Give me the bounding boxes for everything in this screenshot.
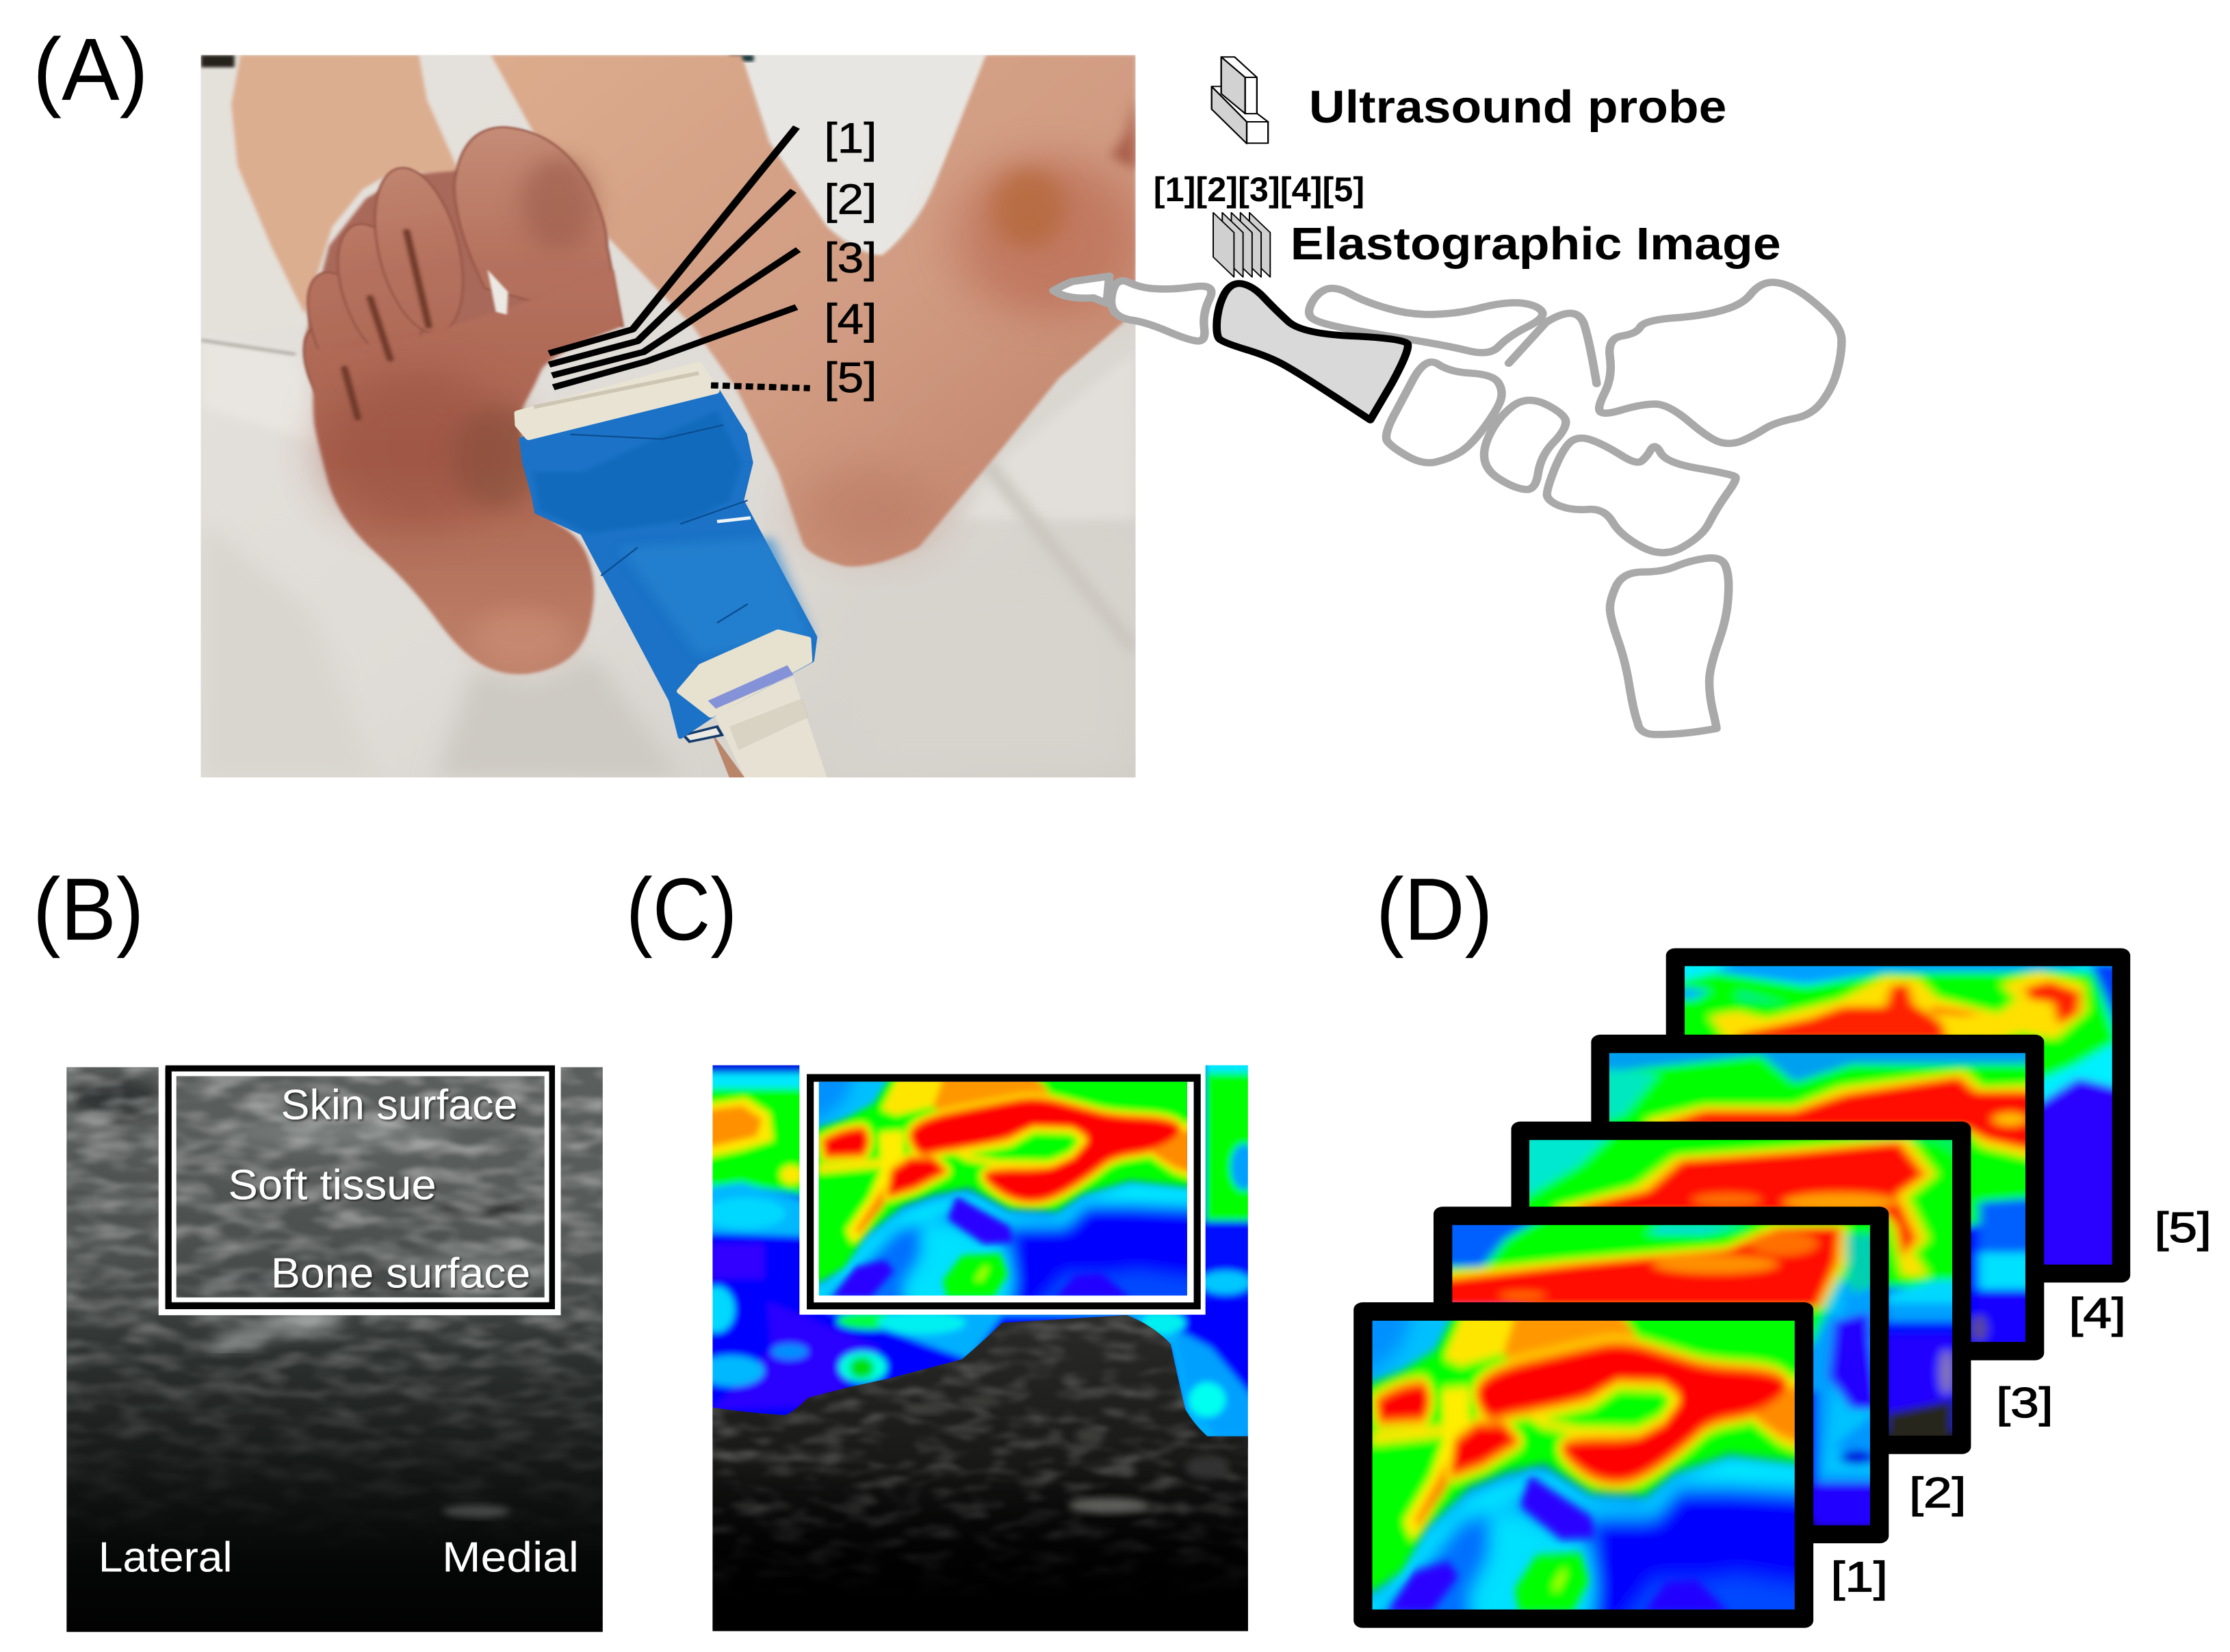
bedding (200, 55, 1136, 777)
second metatarsal outline (1309, 288, 1542, 352)
ultrasound annotations: Skin surface (281, 1081, 517, 1129)
ultrasound annotations (99, 1081, 579, 1581)
ultrasound annotations: Bone surface (271, 1250, 530, 1298)
calcaneus (1599, 283, 1841, 443)
slice labels: [1] (1831, 1553, 1888, 1601)
elastogram slice 3 (1512, 1122, 1971, 1454)
ultrasound annotations: Soft tissue (228, 1161, 437, 1209)
panel D: stack of elastograms (1338, 948, 2130, 1649)
left leg (231, 55, 463, 314)
ultrasound underlay below bone surface (698, 1315, 1262, 1648)
scan plane 5 dotted (711, 385, 810, 388)
highlighted first metatarsal (1217, 283, 1408, 420)
outer colour map (698, 1052, 1262, 1448)
left foot sole and toes (286, 127, 623, 674)
talus (1547, 438, 1736, 553)
foot bone diagram (1054, 57, 1841, 734)
icon: elastographic image stack (1213, 213, 1270, 277)
legend: ultrasound probe: Ultrasound probe (1309, 82, 1726, 133)
proximal phalanx (1111, 281, 1211, 341)
scan plane lines 1 to 4 (549, 127, 799, 387)
region of interest frame (790, 1056, 1218, 1325)
slice labels: [5] (2155, 1204, 2212, 1252)
distal phalanx (1054, 276, 1109, 303)
panel C label: (C) (626, 860, 737, 959)
panel B: B-mode ultrasound image (66, 1067, 603, 1632)
legend: plane numbers: [1][2][3][4][5] (1154, 170, 1364, 209)
right leg and foot (491, 55, 1139, 567)
elastogram slice 5 (1666, 948, 2130, 1282)
elastogram slice 4 (1591, 1035, 2044, 1360)
navicular (1484, 400, 1566, 489)
slice labels: [3] (1996, 1379, 2053, 1427)
scan plane labels: [3] (824, 234, 877, 282)
toe base shading (302, 170, 619, 343)
scan plane labels (824, 114, 877, 402)
scan plane labels: [4] (824, 296, 877, 344)
arch curve (1509, 313, 1596, 384)
cropped elastogram (790, 1056, 1218, 1325)
icon: ultrasound probe (1212, 57, 1268, 144)
scan plane labels: [2] (824, 176, 877, 224)
panel B label: (B) (33, 860, 144, 959)
panel A label: (A) (33, 21, 148, 119)
elastogram slice 2 (1434, 1206, 1889, 1543)
medial cuneiform (1386, 362, 1502, 463)
panel C: elastography overlay (698, 1052, 1262, 1648)
legend: elastographic image: Elastographic Image (1291, 219, 1781, 270)
panel A photo: probe on foot sole (200, 55, 1139, 777)
slice labels: [2] (1909, 1469, 1966, 1517)
scan plane labels: [5] (824, 354, 877, 402)
scan plane labels: [1] (824, 114, 877, 162)
panel D label: (D) (1376, 860, 1493, 959)
ultrasound annotations: Medial (442, 1533, 579, 1581)
slice labels: [4] (2069, 1289, 2126, 1337)
ultrasound probe (518, 365, 827, 777)
elastogram slice 1 (1338, 1285, 1830, 1649)
toes (301, 125, 625, 394)
ultrasound annotations: Lateral (99, 1533, 233, 1581)
sole (313, 270, 623, 674)
tibia (1610, 558, 1728, 734)
region of interest frame (162, 1067, 558, 1312)
slice labels (1831, 1204, 2212, 1601)
